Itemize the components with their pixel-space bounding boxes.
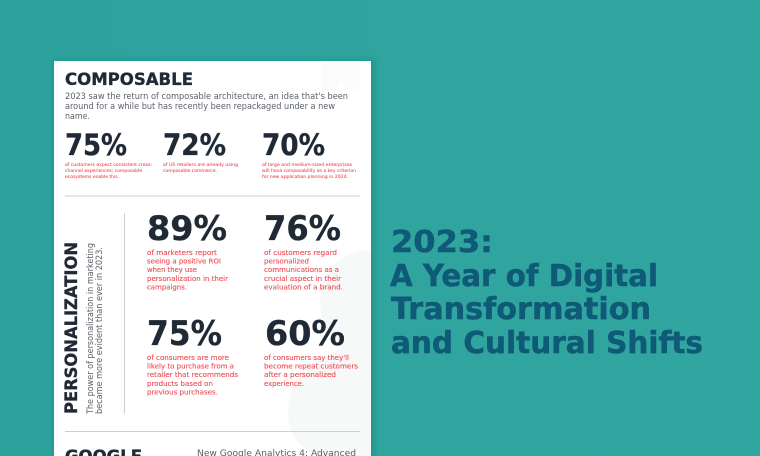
stat: 60 percent: become repeat customers (264, 362, 358, 371)
stat: 75 percent composable: ecosystems enable this. (65, 174, 119, 180)
stat: 89 percent: 89% (147, 209, 227, 249)
stat: 72 percent composable (163, 128, 238, 174)
text block: composable intro: around for a while but has recently been repackaged under a new (65, 102, 335, 112)
text block: personalization intro: The power of personalization in marketing (86, 243, 96, 415)
stat: 70 percent composable: for new application planning in 2024. (262, 174, 348, 180)
stat: 75 percent: likely to purchase from a (147, 362, 234, 371)
panel: personalization section (62, 209, 358, 415)
stat: 75 percent composable: of customers expect consistent cross- (65, 162, 152, 168)
stat: 60 percent: experience. (264, 379, 304, 388)
panel: google section, cropped (66, 449, 356, 456)
stat: 75 percent: previous purchases. (147, 387, 218, 396)
title: Transformation (391, 292, 651, 327)
stat: 75 percent: retailer that recommends (147, 370, 238, 379)
stat: 70 percent composable: 70% (262, 128, 325, 162)
stat: 89 percent: when they use (147, 265, 198, 274)
stat: 89 percent: seeing a positive ROI (147, 257, 221, 266)
stat: 76 percent: evaluation of a brand. (264, 282, 343, 291)
stat: 75 percent composable: channel experiences; composable (65, 168, 142, 174)
stat: 70 percent composable: will have composability as a key criterion (262, 168, 356, 174)
stat: 75 percent (147, 314, 238, 396)
stat: 60 percent: after a personalized (264, 370, 336, 379)
panel: white report card (54, 61, 371, 456)
text block: personalization intro (86, 243, 105, 415)
stat: 72 percent composable: of US retailers are already using (163, 162, 238, 168)
title (390, 225, 703, 361)
stat: 75 percent: 75% (147, 314, 222, 354)
stat: 76 percent: communications as a (264, 265, 339, 274)
text block: composable intro: 2023 saw the return of composable architecture, an idea that's been (65, 92, 348, 102)
stat: 72 percent composable: composable commerce. (163, 168, 217, 174)
stat: 75 percent: of consumers are more (147, 353, 230, 362)
stat: 75 percent composable: 75% (65, 128, 127, 162)
stat: 72 percent composable: 72% (163, 128, 226, 162)
stat: 70 percent composable (262, 128, 356, 180)
stat: 75 percent: products based on (147, 379, 213, 388)
text block: composable intro (65, 92, 348, 122)
stat: 75 percent composable (65, 128, 152, 180)
stat: 89 percent: of marketers report (147, 248, 217, 257)
heading: personalization vertical: PERSONALIZATION (62, 242, 81, 414)
stat: 76 percent: 76% (264, 209, 341, 249)
text block: personalization intro: became more evident than ever in 2023. (95, 247, 105, 414)
stat: 76 percent: personalized (264, 257, 309, 266)
stat: 76 percent (264, 209, 343, 291)
title: A Year of Digital (390, 259, 658, 294)
stat: 60 percent (264, 314, 358, 388)
title: and Cultural Shifts (391, 326, 703, 361)
heading: composable: COMPOSABLE (65, 70, 193, 89)
stat: 89 percent (147, 209, 228, 291)
stat: 60 percent: 60% (265, 314, 345, 354)
title: 2023: (391, 225, 493, 260)
stat: 89 percent: personalization in their (147, 274, 228, 283)
stat: 60 percent: of consumers say they'll (264, 353, 349, 362)
panel: composable section (65, 70, 356, 180)
stat: 70 percent composable: of large and medium-sized enterprises (262, 162, 353, 168)
stat: 89 percent: campaigns. (147, 282, 187, 291)
stat: 76 percent: crucial aspect in their (264, 274, 341, 283)
card shadow (52, 59, 375, 456)
text block: composable intro: name. (65, 112, 90, 122)
stat: 76 percent: of customers regard (264, 248, 337, 257)
